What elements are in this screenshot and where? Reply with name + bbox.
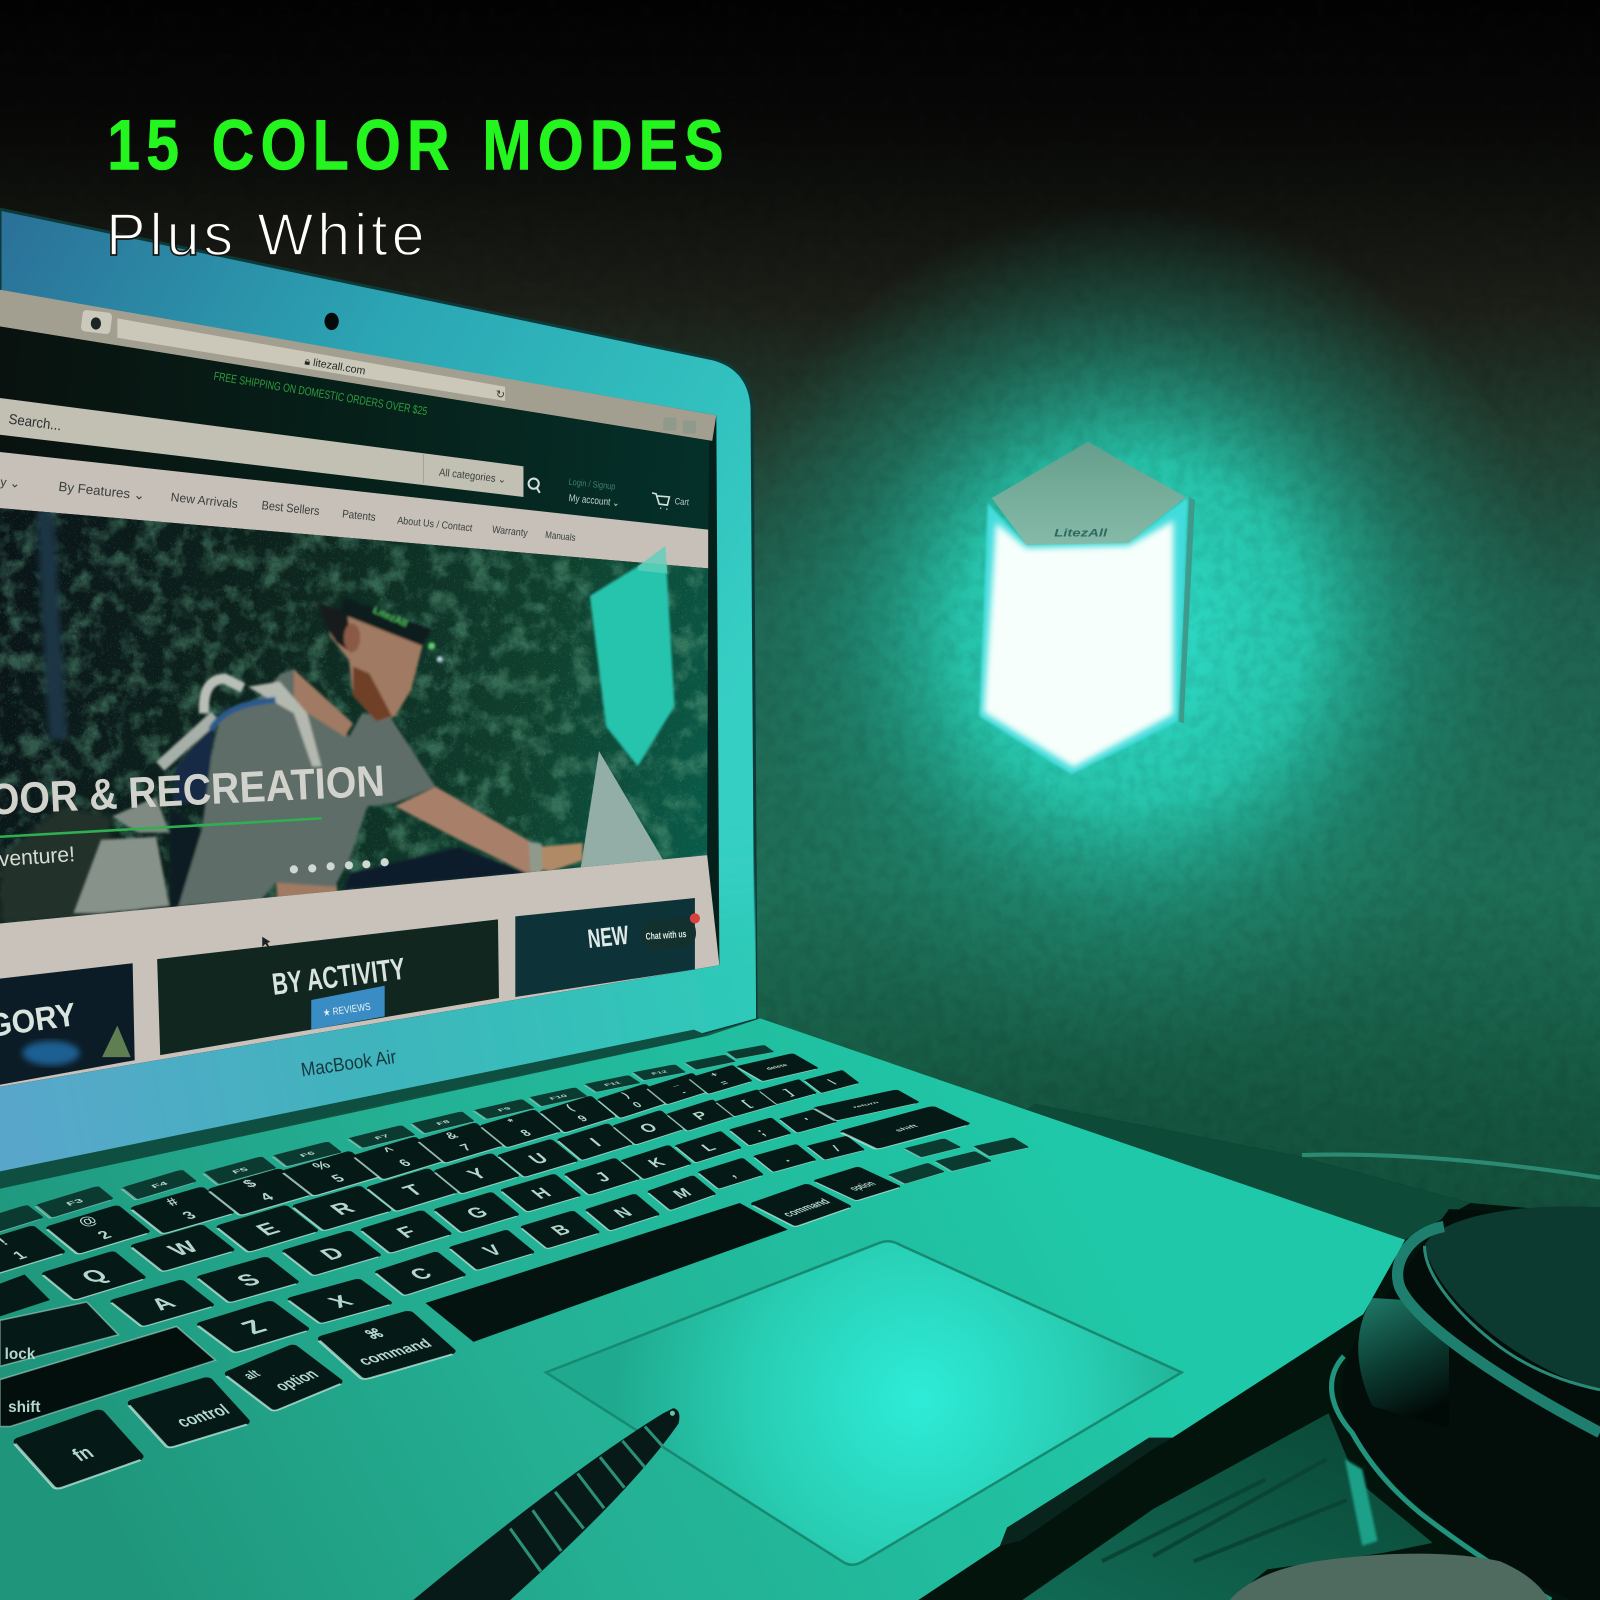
bowl shadowed base <box>1341 1209 1600 1600</box>
navigation bar: y ⌄ <box>0 475 21 491</box>
keyboard qwerty row: O <box>636 1120 662 1136</box>
navigation bar: Best Sellers <box>261 498 320 518</box>
mouse cursor <box>262 937 270 948</box>
navigation bar: About Us / Contact <box>397 516 473 534</box>
keyboard home row <box>109 1089 920 1327</box>
navigation bar: New Arrivals <box>170 490 239 511</box>
shop header: Cart <box>674 496 690 507</box>
shop header: Search... <box>8 412 62 434</box>
keyboard function row: F3 <box>64 1198 86 1207</box>
keyboard qwerty row: \ <box>825 1077 840 1086</box>
keyboard home row: H <box>526 1185 556 1202</box>
keyboard number row: + <box>708 1071 722 1079</box>
keyboard number row: _ <box>666 1080 681 1088</box>
keyboard qwerty row: W <box>162 1237 206 1260</box>
keyboard number row: $ <box>239 1178 261 1190</box>
title: 15 COLOR MODES <box>107 105 730 185</box>
card: by activity <box>157 919 499 1055</box>
night light lamp <box>980 442 1195 774</box>
keyboard number row: ( <box>563 1103 577 1113</box>
table lit wood <box>1022 1413 1433 1600</box>
keyboard home row: A <box>144 1293 182 1314</box>
keyboard qwerty row: ] <box>780 1087 796 1097</box>
browser toolbar: 🔒︎ litezall.com <box>304 355 366 377</box>
dark metal bowl <box>1332 1206 1600 1600</box>
keyboard bottom letter row: X <box>322 1292 359 1312</box>
keyboard number row: 9 <box>575 1113 591 1124</box>
navigation bar: Patents <box>342 508 377 524</box>
keyboard home row: ; <box>752 1126 769 1137</box>
keyboard qwerty row: P <box>689 1109 712 1123</box>
keyboard bottom letter row: Z <box>234 1316 273 1338</box>
keyboard home row: return <box>852 1101 881 1109</box>
keyboard function row: F11 <box>602 1081 623 1087</box>
keyboard function row <box>0 1045 774 1238</box>
keyboard number row: ) <box>619 1091 632 1100</box>
keyboard number row <box>0 1053 819 1275</box>
keyboard modifier row: command <box>355 1337 436 1368</box>
keyboard number row: = <box>718 1079 732 1087</box>
navigation bar: Warranty <box>492 525 529 539</box>
keyboard qwerty row: Q <box>76 1265 114 1287</box>
keyboard number row: % <box>309 1159 335 1173</box>
keyboard bottom letter row: V <box>478 1242 508 1260</box>
trackpad <box>546 1241 1182 1565</box>
webcam <box>324 313 339 330</box>
keyboard number row: 0 <box>630 1100 645 1110</box>
keyboard function row: F6 <box>298 1150 317 1158</box>
shop header <box>0 327 709 531</box>
keyboard bottom letter row: N <box>609 1204 636 1221</box>
card: new <box>515 898 700 997</box>
keyboard home row: L <box>698 1141 720 1154</box>
keyboard number row: 2 <box>94 1229 116 1242</box>
backpack <box>73 837 169 913</box>
browser toolbar <box>0 290 716 441</box>
laptop screen: website <box>0 290 719 1087</box>
card: new: Chat with us <box>645 929 687 943</box>
lamp glowing body <box>980 497 1188 774</box>
subtitle: Plus White <box>106 201 424 268</box>
hero photo <box>0 500 714 929</box>
keyboard qwerty row: T <box>398 1182 428 1200</box>
screen base <box>0 291 719 1087</box>
keyboard bottom letter row: , <box>723 1168 740 1180</box>
keyboard modifier row: control <box>173 1402 234 1431</box>
hiker <box>73 597 583 913</box>
keyboard function row: F9 <box>496 1106 513 1112</box>
map <box>581 751 663 868</box>
keyboard number row: 3 <box>179 1209 201 1222</box>
left shift key <box>0 1327 215 1427</box>
shop header: My account ⌄ <box>568 493 620 509</box>
keyboard bottom letter row: . <box>778 1154 794 1164</box>
card: by activity: BY ACTIVITY <box>270 952 407 1002</box>
shop header: All categories ⌄ <box>438 467 507 486</box>
keyboard number row: 1 <box>10 1249 31 1262</box>
navigation bar: Manuals <box>545 530 576 544</box>
laptop hinge <box>0 1030 708 1190</box>
keyboard bottom letter row: B <box>546 1221 575 1238</box>
keyboard bottom letter row: M <box>669 1186 696 1201</box>
navigation bar: By Features ⌄ <box>58 479 146 503</box>
keyboard modifier row: fn <box>68 1443 99 1466</box>
lamp logo: LitezAll <box>1054 528 1108 540</box>
power cord <box>1302 1155 1600 1178</box>
keyboard home row: F <box>392 1223 422 1241</box>
keyboard number row: 5 <box>328 1172 349 1185</box>
keyboard modifier row: option <box>271 1367 323 1394</box>
pen <box>413 1408 679 1600</box>
shirt <box>179 669 436 906</box>
keyboard function row: F7 <box>373 1133 391 1140</box>
keyboard number row: ^ <box>379 1144 399 1156</box>
lamp reflection <box>590 546 674 766</box>
keyboard qwerty row: [ <box>738 1098 755 1108</box>
keyboard home row: J <box>590 1169 615 1185</box>
keyboard function row: F5 <box>231 1167 251 1175</box>
keyboard home row: K <box>644 1155 670 1170</box>
left shift key: shift <box>8 1399 40 1416</box>
table surface <box>898 1104 1600 1600</box>
caps lock key <box>0 1302 118 1366</box>
bowl side face <box>1358 1298 1449 1429</box>
keyboard bottom letter row <box>195 1106 972 1353</box>
keyboard bottom letter row: shift <box>892 1123 920 1133</box>
card: new: NEW <box>586 920 630 954</box>
keyboard home row: D <box>314 1243 350 1263</box>
keyboard number row: 8 <box>517 1127 535 1138</box>
keyboard qwerty row: I <box>585 1135 605 1149</box>
bowl lid rim <box>1398 1227 1600 1433</box>
keyboard number row: & <box>441 1129 461 1142</box>
lamp reflection over nav bar <box>638 546 667 573</box>
MacBook Air label: MacBook Air <box>300 1046 398 1081</box>
navigation bar <box>0 452 708 568</box>
keyboard number row: - <box>679 1089 690 1096</box>
keyboard qwerty row: U <box>523 1150 553 1167</box>
keyboard number row: 6 <box>395 1156 415 1169</box>
keyboard modifier row: command <box>780 1198 834 1219</box>
laptop lid <box>0 208 758 1172</box>
head <box>321 606 422 721</box>
slider dots <box>290 858 389 873</box>
keyboard number row: @ <box>74 1214 102 1229</box>
keyboard function row: F8 <box>434 1119 452 1126</box>
pale round object at bottom <box>1230 1554 1549 1600</box>
keyboard number row: delete <box>764 1063 790 1071</box>
keyboard home row: ' <box>801 1116 816 1125</box>
keyboard function row: F10 <box>548 1093 570 1101</box>
keyboard home row: S <box>231 1270 266 1290</box>
card: category <box>0 963 135 1085</box>
keyboard number row: 4 <box>256 1191 278 1204</box>
keyboard qwerty row: R <box>324 1198 360 1219</box>
hero green rule <box>0 818 321 837</box>
shop header: Login / Signup <box>568 477 616 492</box>
keyboard number row: # <box>162 1196 184 1209</box>
keyboard function row: F4 <box>150 1181 170 1190</box>
laptop deck <box>0 1018 1405 1600</box>
keyboard function row: F12 <box>650 1070 669 1076</box>
bowl lower rim <box>1332 1356 1551 1600</box>
lamp cap <box>992 442 1186 545</box>
keyboard modifier row: alt <box>240 1367 264 1382</box>
keyboard bottom letter row: / <box>828 1143 844 1153</box>
bowl lid <box>1424 1206 1600 1390</box>
keyboard bottom letter row: C <box>405 1265 438 1284</box>
keyboard qwerty row: E <box>250 1219 285 1239</box>
keyboard number row: 7 <box>456 1141 475 1153</box>
keyboard qwerty row: Y <box>463 1165 492 1183</box>
keyboard modifier row <box>0 1137 1030 1490</box>
keyboard modifier row: option <box>846 1180 880 1193</box>
card: by activity: ★ REVIEWS <box>322 1002 372 1019</box>
shop header: FREE SHIPPING ON DOMESTIC ORDERS OVER $25 <box>213 370 429 418</box>
lower page area <box>0 855 719 1087</box>
keyboard qwerty row <box>0 1070 860 1316</box>
hiker: LitezAll <box>371 605 409 630</box>
keyboard number row: * <box>504 1116 520 1127</box>
browser toolbar: ↻ <box>496 389 505 401</box>
keyboard <box>0 1045 1030 1490</box>
arm <box>395 787 538 873</box>
keyboard modifier row: ⌘ <box>361 1327 389 1343</box>
keyboard home row: G <box>462 1204 493 1222</box>
